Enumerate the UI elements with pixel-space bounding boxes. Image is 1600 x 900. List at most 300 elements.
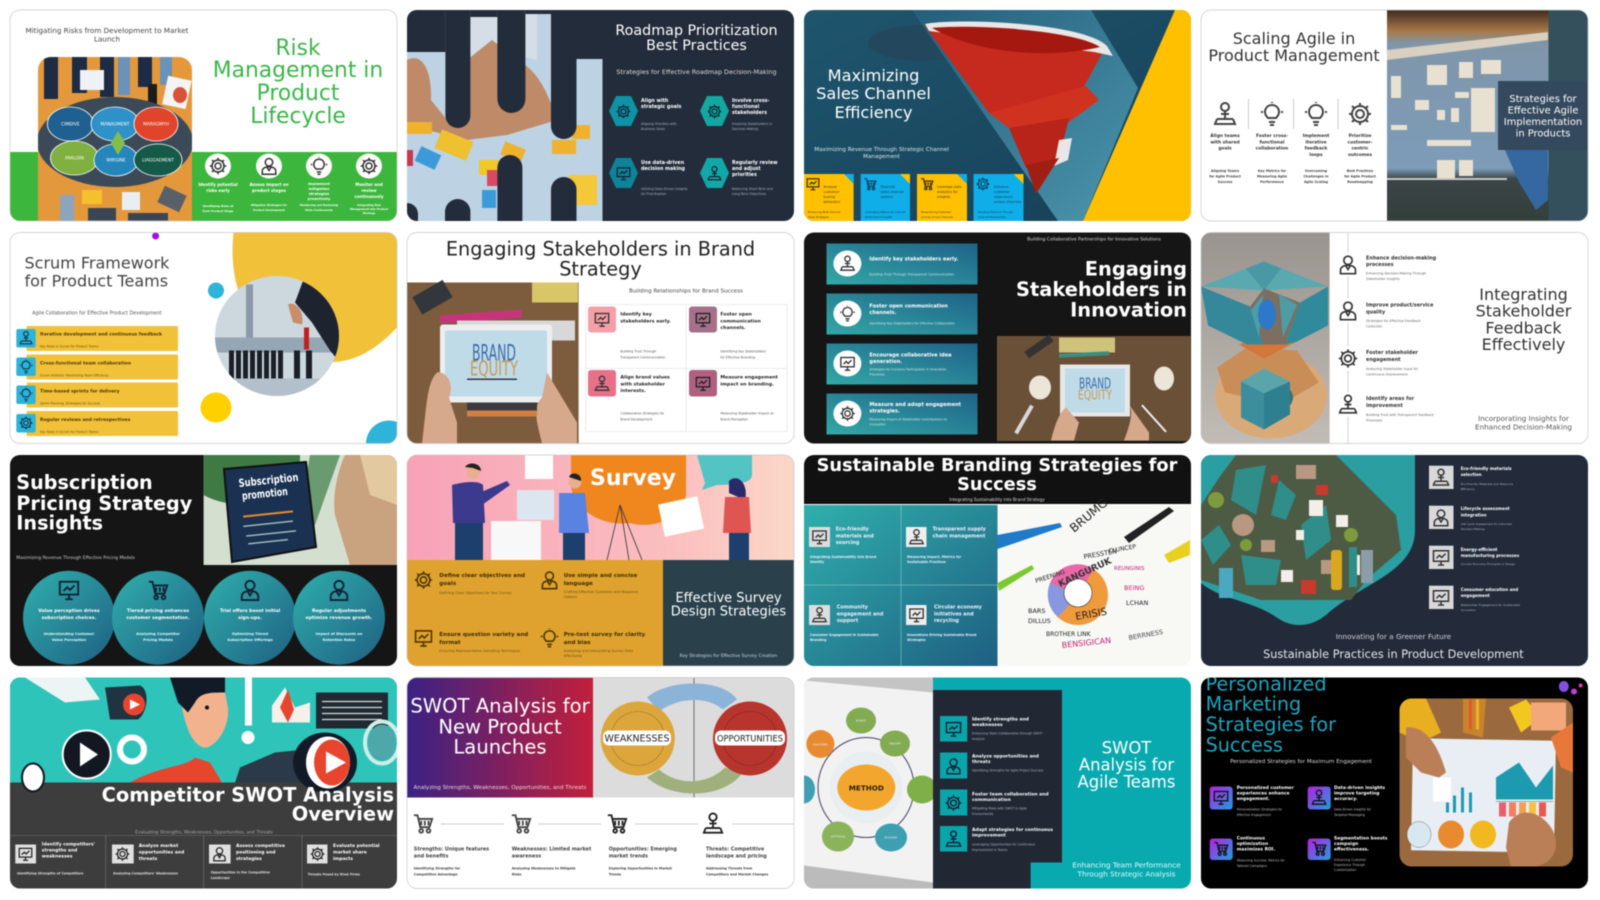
panel: SWOT Analysis for New Product Launches: [407, 678, 794, 888]
image: hand-written brand mind map with markers: ERISIS: [1075, 607, 1108, 623]
item 3: Brand Development: [620, 418, 653, 422]
column 3: Implement: [1303, 133, 1329, 139]
quadrant 4: Strategies: [907, 638, 926, 642]
item 4: [689, 370, 779, 422]
bubble 1: [23, 571, 115, 665]
quadrant 2: [906, 526, 987, 564]
image: meeting table with overlapping circles: CIMDIVE: [61, 122, 80, 128]
item 3: Foster stakeholder: [1366, 350, 1419, 356]
item 2: Collection: [1366, 324, 1382, 328]
card: enhance: [974, 174, 1024, 221]
item 1: Personalization Strategies for: [1237, 808, 1283, 812]
item 4: Consumer education and: [1461, 587, 1518, 592]
title: Engaging Stakeholders in Brand: [446, 238, 755, 260]
item 4: Innovation: [869, 422, 886, 426]
bubble 2: Analyzing Competitor: [136, 632, 180, 636]
bubble 3: Optimizing Tiered: [232, 632, 269, 636]
callout box: Implementation: [1504, 117, 1582, 128]
title: Overview: [292, 802, 394, 826]
quadrant 2: Sustainable Practices: [907, 560, 946, 564]
item 4: Customization: [1334, 868, 1356, 872]
card: analyze: buying: [824, 195, 835, 199]
image: tablet with subscription promotion: promotion: [241, 485, 288, 503]
step 4: Strategy: [363, 211, 376, 215]
dark content panel: [933, 690, 1062, 888]
item 3: Analyzing Stakeholder Input for: [1366, 367, 1419, 371]
quadrant 1: Integrating Sustainability into Brand: [810, 555, 877, 559]
item: data-driven: Use data-driven: [641, 160, 685, 166]
step 4: review: [361, 188, 377, 193]
card: diversify: Leveraging Metrics for Channel: [865, 210, 906, 214]
item 2: communication: [720, 318, 761, 324]
item 1: [940, 716, 1043, 742]
image: tablet with subscription promotion: [204, 455, 397, 565]
bar 3: Time-based sprints for delivery: [40, 388, 120, 394]
item 2: [1308, 785, 1385, 817]
quadrant 2: Transparent supply: [933, 526, 987, 532]
subtitle: Mitigating Risks from Development to Market: [25, 26, 189, 35]
bubble 4: Impact of Discounts on: [316, 632, 363, 636]
item 2: Life Cycle Assessment for Informed: [1461, 522, 1512, 526]
bar 1: Key Roles in Scrum for Product Teams: [40, 344, 99, 348]
col 1: [15, 842, 95, 876]
image: hand-written brand mind map with markers: REUNGINIS: [1114, 566, 1145, 572]
step: strengths: Strengths: Unique features: [414, 846, 489, 852]
col 4: market share: [333, 850, 367, 856]
yellow blob: [233, 228, 397, 362]
title: Analysis for: [1079, 756, 1174, 774]
item 1: Eco-Friendly Materials and Resource: [1461, 482, 1513, 486]
item 2: threats: [972, 759, 991, 765]
item 1: Identify strengths and: [972, 716, 1029, 722]
item 2: [1337, 298, 1434, 328]
item 4: impact on branding.: [720, 382, 774, 388]
bubble 1: subscription choices.: [42, 615, 97, 621]
image: heap of recycled materials on teal shape: [1201, 455, 1415, 625]
item 3: [588, 370, 670, 422]
subtitle: Integrating Sustainability into Brand Strategy: [949, 497, 1045, 502]
card: enhance: Enhance: [994, 185, 1009, 189]
item 2: Lifecycle assessment: [1461, 506, 1510, 511]
quadrant 3: Branding: [810, 638, 827, 642]
item 2: language: [564, 581, 593, 587]
quadrant 4: Circular economy: [934, 604, 983, 610]
image: method cycle diagram: KANGS: [856, 718, 866, 722]
table frame: [586, 304, 787, 432]
title: Subscription: [16, 471, 153, 494]
item 1: Identify key: [620, 312, 652, 318]
step: opportunities: Trends: [609, 872, 621, 876]
col 4: impacts: [333, 856, 353, 862]
item: data-driven: for Prioritization: [641, 192, 666, 196]
item 3: manufacturing processes: [1461, 553, 1520, 558]
quadrant 2: Measuring Impact: Metrics for: [907, 555, 962, 559]
item 4: effectiveness.: [1334, 846, 1369, 852]
image: hand-written brand mind map with markers: BERRNESS: [1128, 628, 1164, 642]
step: threats: [704, 813, 768, 876]
item 1: [1210, 785, 1295, 817]
item: data-driven: Utilizing Data-Driven Insights: [641, 187, 688, 191]
step 2: product stages: [252, 188, 287, 193]
bar 3: [16, 382, 178, 408]
callout box: in Products: [1516, 128, 1570, 140]
item 2: Analyze opportunities and: [972, 754, 1039, 760]
item: involve stakeholders: [700, 96, 772, 131]
item 4: engagement: [1461, 593, 1490, 598]
bar 2: Cross-functional team collaboration: [40, 360, 131, 366]
card: analyze: Enhancing Multi-Channel: [808, 210, 841, 214]
step: weaknesses: awareness: [512, 854, 541, 860]
bubble 2: Pricing Models: [143, 638, 173, 642]
item 1: [826, 244, 978, 284]
column 4: customer-: [1348, 140, 1373, 146]
item 4: Measuring Impact of Stakeholder Contributions on: [869, 418, 947, 422]
image: circular city photo with figures: [215, 276, 340, 398]
item 3: format: [439, 640, 461, 646]
item 3: communication: [972, 797, 1011, 803]
subtitle: Enhanced Decision-Making: [1475, 422, 1572, 432]
image: hand-written brand mind map with markers: PREENING: [1034, 569, 1066, 585]
image: meeting table with overlapping circles: MARAGMYH: [143, 122, 169, 128]
panel: Maximizing Sales Channel Efficiency: [804, 10, 1191, 221]
item 1: Identify key stakeholders early.: [869, 256, 959, 262]
callout box: [1498, 81, 1588, 150]
item 2: improve targeting: [1334, 790, 1379, 796]
step 3: mitigation: [309, 187, 330, 191]
gradient title block: New Product: [438, 716, 562, 738]
step 1: Identifying Risks at: [203, 204, 234, 208]
panel: Scrum Framework for Product Teams: [9, 232, 398, 444]
quadrant 4: [906, 604, 983, 642]
title: Best Practices: [646, 38, 747, 54]
card: analyze: Analyze: [824, 185, 837, 189]
item 1: Building Trust Through: [620, 350, 656, 354]
bar 2: [16, 354, 178, 380]
step: strengths: Identifying Strengths for: [414, 866, 460, 870]
column 3: Overcoming: [1305, 169, 1328, 173]
item: regularly review: [700, 158, 778, 196]
item: align with strategic goals: Aligning Priorities with: [641, 122, 677, 126]
title: Lifecycle: [250, 104, 346, 129]
item 2: [1429, 506, 1512, 531]
col 3: Assess competitive: [236, 843, 285, 849]
image: tablet showing brand equity: [407, 280, 579, 444]
column 3: loops: [1309, 152, 1323, 158]
bubble 3: [204, 571, 296, 665]
title: Effectively: [1482, 335, 1565, 354]
col 2: Analyzing Competitors' Weaknesses: [113, 872, 178, 876]
card: diversify: Performance Insights: [865, 215, 893, 219]
title: SWOT: [1102, 738, 1152, 758]
panel: Engaging Stakeholders in Brand Strategy: [407, 232, 794, 444]
bar 1: [16, 326, 178, 351]
item: regularly review: and adjust: [732, 166, 761, 172]
col 4: Threats Posed by Rival Firms: [308, 872, 360, 876]
panel: Subscription Pricing Strategy Insights: [10, 455, 397, 666]
col 3: strategies: [236, 856, 262, 862]
image: meeting table with overlapping circles: MANAGMENT: [101, 122, 130, 128]
item 4: [1337, 392, 1434, 422]
step: opportunities: [608, 815, 677, 876]
title: Marketing: [1206, 692, 1301, 716]
item 1: stakeholders early.: [620, 318, 671, 324]
timeline line: [1347, 232, 1349, 444]
column 1: Align teams: [1210, 133, 1240, 139]
bubble 2: Tiered pricing enhances: [127, 608, 189, 614]
quadrant 4: Innovations Driving Sustainable Brand: [907, 633, 977, 637]
item 3: [826, 344, 978, 384]
step 2: Product Development: [253, 208, 286, 212]
column 4: Best Practices: [1347, 169, 1373, 173]
item 2: Improve product/service: [1366, 302, 1434, 308]
step 1: risks early: [206, 188, 230, 193]
image: hand-written brand mind map with markers: [998, 496, 1191, 666]
title: Strategies for: [1206, 713, 1336, 736]
title: Insights: [16, 512, 103, 534]
item 3: Foster team collaboration and: [972, 792, 1049, 798]
column 4: centric: [1351, 146, 1369, 152]
item 2: Foster open communication: [869, 304, 948, 310]
item 3: Collaborative Strategies for: [620, 412, 665, 416]
col 2: threats: [139, 856, 158, 862]
item 2: Identifying Key Stakeholders for Effective Collaboration: [869, 322, 955, 326]
item 3: generation.: [869, 359, 902, 365]
item 4: [826, 394, 978, 434]
item 4: Effectively: [564, 654, 582, 658]
card: leverage: analytics for: [937, 190, 959, 194]
item 4: Measuring Stakeholder Impact on: [720, 412, 774, 416]
item 3: Align brand values: [620, 374, 670, 380]
col 3: [209, 843, 285, 880]
subtitle: Building Relationships for Brand Success: [629, 288, 743, 294]
item 1: Enhancing Team Collaboration through SWOT: [972, 732, 1043, 736]
column 2: [1256, 102, 1288, 184]
step 2: [249, 154, 289, 212]
item 4: Enhancing Customer: [1334, 858, 1367, 862]
title: Product Management: [1208, 46, 1380, 65]
subtitle: Strategies for Effective Roadmap Decision-Making: [616, 68, 777, 76]
quadrant 3: support: [837, 618, 859, 624]
image: teal cubes and rocket sculpture: [1201, 232, 1330, 444]
card: analyze: Sales Strategies: [808, 215, 830, 219]
subtitle: Maximizing Revenue Through Strategic Channel: [814, 147, 949, 153]
item 1: [588, 306, 671, 360]
step 4: Integrating Risk: [357, 203, 381, 207]
teal quadrant panel: [804, 505, 998, 666]
image: tablet showing brand equity: BRAND: [472, 342, 516, 366]
quadrant 3: engagement and: [837, 612, 884, 618]
image: meeting table with overlapping circles: LIAGGAEMENT: [142, 158, 174, 164]
item 4: Improvement in Teams: [972, 848, 1008, 852]
image: tablet on wooden desk: BRAND: [1079, 374, 1111, 392]
col 1: Identifying Strengths of Competitors: [17, 872, 84, 876]
image: method cycle diagram: DAATONS: [813, 742, 828, 746]
item 3: [1210, 836, 1285, 868]
subtitle: Agile Collaboration for Effective Product Development: [32, 310, 162, 316]
quadrant 4: recycling: [934, 618, 960, 624]
item 4: Processes: [1366, 418, 1383, 422]
col 2: Analyze market: [139, 843, 179, 849]
bar 4: Key Roles in Scrum for Product Teams: [40, 430, 99, 434]
title: Maximizing: [828, 66, 919, 85]
image: method cycle diagram: [793, 678, 937, 888]
step 1: Each Product Stage: [203, 209, 234, 213]
col 4: Evaluate potential: [333, 843, 380, 849]
card: enhance: customer: [994, 190, 1011, 194]
decorative circles: [200, 282, 398, 444]
item 2: [689, 306, 766, 360]
item 3: Energy-efficient: [1461, 547, 1497, 552]
item 4: Adapt strategies for continuous: [972, 827, 1053, 833]
item: regularly review: Balancing Short-Term and: [732, 187, 773, 191]
item: involve stakeholders: functional: [732, 104, 760, 110]
title panel: Effective Survey: [675, 591, 782, 606]
column 4: [1344, 103, 1376, 184]
image: method cycle diagram: RUUGNY: [885, 836, 898, 840]
item 2: channels.: [720, 325, 746, 331]
item 4: Pre-test survey for clarity: [564, 632, 646, 638]
subtitle: Evaluating Strengths, Weaknesses, Opportunities, and Threats: [135, 830, 273, 836]
item 1: [415, 571, 525, 595]
image: hand-written brand mind map with markers: BARS: [1028, 607, 1046, 615]
title: Competitor SWOT Analysis: [102, 784, 394, 806]
subtitle: Incorporating Insights for: [1478, 414, 1569, 423]
item 1: Enhance decision-making: [1366, 256, 1437, 262]
item: regularly review: Long-Term Objectives: [732, 192, 766, 196]
item 1: [1337, 252, 1437, 281]
item 3: Environments: [972, 812, 994, 816]
step: strengths: [414, 815, 489, 876]
item: involve stakeholders: Decision-Making: [732, 127, 758, 131]
item 1: Enhancing Decision-Making Through: [1366, 272, 1426, 276]
image: red funnel on diagonal: [868, 10, 1138, 221]
bubble 4: Regular adjustments: [312, 608, 366, 614]
quadrant 1: [809, 526, 877, 564]
card: leverage: [917, 174, 967, 221]
item 2: Use simple and concise: [564, 573, 637, 579]
step 1: Identify potential: [198, 182, 238, 187]
title: Stakeholder: [1476, 302, 1572, 320]
item 2: [940, 752, 1044, 778]
bar 4: [16, 411, 178, 436]
bubble 4: optimize revenue growth.: [306, 615, 373, 621]
item 3: Encourage collaborative idea: [869, 352, 951, 358]
item 3: [1429, 546, 1520, 569]
item 1: Transparent Communication: [619, 356, 665, 360]
item: data-driven: decision making: [641, 166, 686, 172]
item 2: Data-driven insights: [1334, 785, 1385, 791]
column 4: Roadmapping: [1347, 180, 1373, 184]
item 4: campaign: [1334, 841, 1358, 847]
quadrant 4: initiatives and: [934, 612, 974, 618]
card: diversify: Diversify: [880, 185, 895, 189]
title: Innovation: [1070, 298, 1187, 322]
item: involve stakeholders: stakeholders: [732, 110, 767, 116]
item 2: channels.: [869, 310, 896, 316]
item 4: Innovation: [1461, 608, 1476, 612]
card: leverage: insights: [937, 195, 950, 199]
image: hand-written brand mind map with markers: DILLUS: [1028, 617, 1051, 625]
step 3: proactively: [308, 197, 331, 201]
bubble 2: [112, 571, 204, 665]
item 1: processes: [1366, 262, 1394, 268]
bubble 1: Value Perception: [52, 638, 87, 642]
card: analyze: behaviors: [824, 200, 840, 204]
illustration: man with camera on teal: [10, 676, 399, 792]
col 2: [112, 843, 184, 876]
image: weaknesses and opportunities cycle: WEAKNESSES: [604, 734, 670, 744]
card: enhance: Channel Partnerships: [978, 215, 1006, 219]
bubble 4: [293, 571, 385, 665]
accent dot: [152, 232, 159, 240]
title: Engaging: [1085, 258, 1187, 280]
image: hand-written brand mind map with markers: BEING: [1124, 584, 1144, 592]
title panel: [663, 560, 794, 666]
step: strengths: and benefits: [414, 854, 448, 860]
image: tablet on wooden desk: EQUITY: [1078, 388, 1112, 404]
item 1: Building Trust Through Transparent Communication: [869, 272, 954, 276]
image: weaknesses and opportunities cycle: [593, 678, 794, 798]
title: Risk: [275, 36, 321, 61]
item 1: Define clear objectives and: [439, 573, 525, 579]
image: hand-written brand mind map with markers: CLUNCEP: [1108, 543, 1137, 555]
image: agile planning wall: [1387, 10, 1588, 221]
panel: Risk Management in Product Lifecycle: [10, 10, 397, 227]
column 3: feedback: [1305, 146, 1327, 152]
bubble 1: Understanding Customer: [44, 632, 95, 636]
image: hand-written brand mind map with markers: BROTHER LINK: [1046, 631, 1092, 638]
step 4: Monitor and: [355, 182, 383, 187]
col 3: Opportunities in the Competitive: [211, 870, 270, 874]
item 1: selection: [1461, 472, 1482, 477]
item 4: strategies.: [869, 408, 900, 414]
item 1: weaknesses: [972, 722, 1003, 728]
title: Roadmap Prioritization: [615, 23, 778, 39]
step: strengths: Competitive Advantage: [414, 872, 458, 876]
item 3: Tailored Campaigns: [1236, 864, 1267, 868]
bubble 1: Value perception drives: [38, 608, 100, 614]
item 2: Identifying Key Stakeholders: [720, 350, 766, 354]
panel: SWOT Analysis for Agile Teams: [793, 678, 1191, 888]
panel: Sustainable Branding Strategies for Success: [804, 455, 1191, 666]
card: leverage: Leverage data: [937, 185, 961, 189]
item 3: Mitigating Risks with SWOT in Agile: [972, 806, 1027, 810]
item 2: Identifying Strengths for Agile Project Success: [972, 768, 1044, 772]
step: weaknesses: [512, 815, 592, 876]
subtitle: Enhancing Team Performance: [1072, 860, 1181, 870]
step: weaknesses: Weaknesses: Limited market: [512, 846, 592, 852]
image: method cycle diagram: OTTTDUG: [831, 834, 846, 838]
quadrant 1: sourcing: [836, 540, 860, 546]
item 3: Ensure question variety and: [439, 632, 528, 638]
item 3: [940, 790, 1049, 816]
panel: Scaling Agile in Product Management: [1201, 10, 1588, 221]
column 1: for Agile Product: [1209, 174, 1241, 178]
item 1: engagement.: [1237, 796, 1270, 802]
quadrant 3: Consumer Engagement in Sustainable: [810, 633, 878, 637]
quadrant 3: [809, 604, 884, 642]
quadrant 2: chain management: [933, 534, 986, 540]
item 4: Identify areas for: [1366, 396, 1415, 402]
item 3: Ensuring Representative Sampling Techniques: [439, 649, 520, 653]
step 4: continuously: [355, 194, 384, 199]
item 1: Analysis: [972, 737, 985, 741]
item 4: improvement: [1366, 403, 1403, 409]
item 4: Building Trust with Transparent Feedback: [1366, 413, 1434, 417]
card: analyze: [804, 174, 854, 221]
bar 2: Scrum Artifacts: Maximizing Team Efficiency: [40, 374, 109, 378]
item: align with strategic goals: Align with: [641, 98, 669, 104]
